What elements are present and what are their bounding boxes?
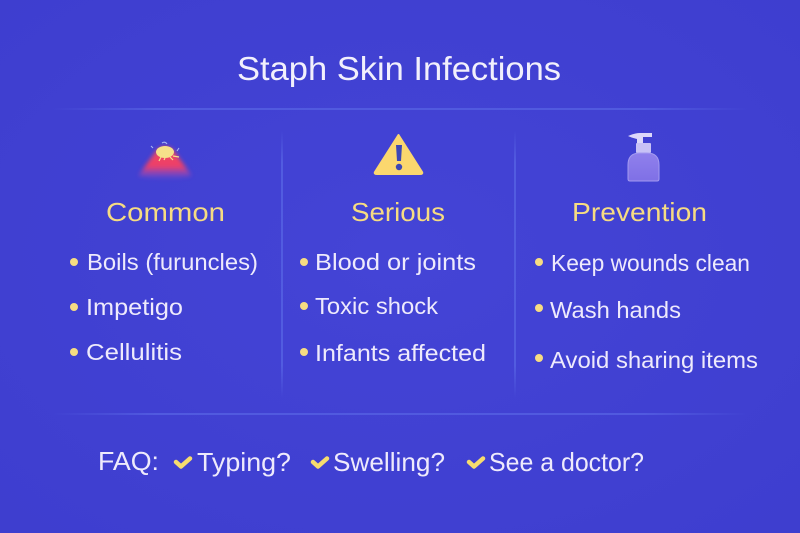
list item: keep wounds clean: Keep wounds clean (551, 250, 750, 276)
list item: impetigo: Impetigo (86, 294, 183, 320)
icon: warning triangle (375, 135, 422, 174)
list item: boils: Boils (furuncles) (87, 249, 258, 275)
heading: common: Common (106, 197, 225, 227)
FAQ label: FAQ: (98, 446, 159, 476)
FAQ item: see a doctor: See a doctor? (489, 447, 644, 477)
list item: cellulitis: Cellulitis (86, 339, 182, 365)
icon: boil (138, 142, 192, 180)
FAQ row (98, 446, 644, 477)
list item: avoid sharing items: Avoid sharing items (550, 347, 758, 373)
heading: prevention: Prevention (572, 197, 707, 227)
list item: infants affected: Infants affected (315, 340, 486, 366)
title: Staph Skin Infections (237, 50, 561, 87)
FAQ item: swelling: Swelling? (333, 447, 445, 477)
list item: toxic shock: Toxic shock (315, 293, 439, 319)
FAQ item: typing: Typing? (197, 447, 291, 477)
panel: common (70, 142, 258, 365)
heading: serious: Serious (351, 197, 445, 227)
list item: wash hands: Wash hands (550, 297, 681, 323)
icon: soap dispenser (628, 133, 659, 181)
list item: blood or joints: Blood or joints (315, 249, 476, 275)
panel: serious (300, 135, 486, 366)
panel: prevention (535, 133, 758, 373)
